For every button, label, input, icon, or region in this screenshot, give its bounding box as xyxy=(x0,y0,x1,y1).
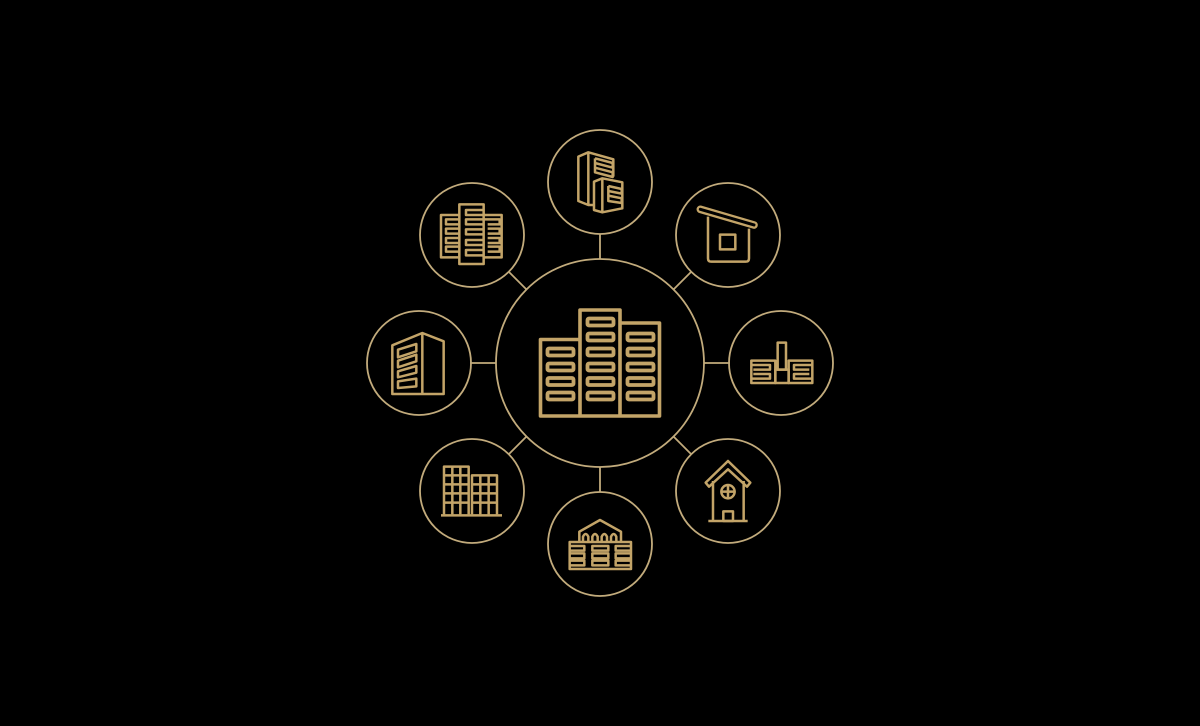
node: sloped roof house (upper right) xyxy=(676,183,780,287)
icon: low wings with tower xyxy=(751,343,812,383)
node: cottage (lower right) xyxy=(676,439,780,543)
icon: cottage xyxy=(706,461,750,521)
node: classical hall (bottom) xyxy=(548,492,652,596)
icon: corner office block xyxy=(392,333,444,394)
icon: sloped roof house xyxy=(700,209,754,262)
icon: three slatted towers xyxy=(441,204,502,264)
node: three slatted towers (upper left) xyxy=(420,183,524,287)
icon: classical hall xyxy=(570,520,631,569)
node: grid-window blocks (lower left) xyxy=(420,439,524,543)
central hub: office towers xyxy=(496,259,704,467)
icon: twin angled towers xyxy=(578,152,622,212)
node: twin angled towers (top) xyxy=(548,130,652,234)
icon: grid-window blocks xyxy=(441,467,502,515)
icon: three towers xyxy=(540,310,660,416)
node: low wings with tower (right) xyxy=(729,311,833,415)
connector lines xyxy=(470,234,730,492)
node: corner office block (left) xyxy=(367,311,471,415)
